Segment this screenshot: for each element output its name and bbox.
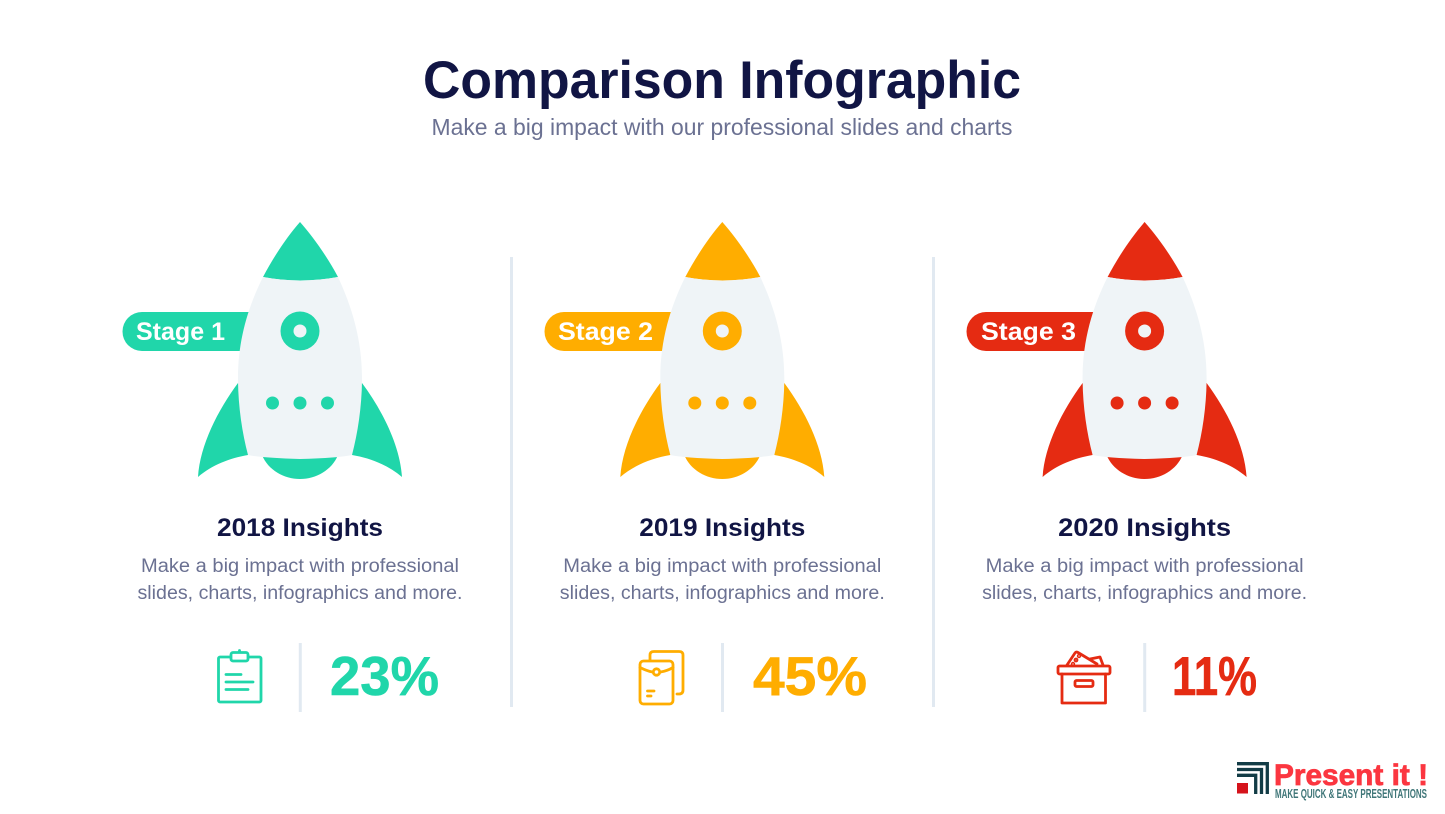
- rocket 3: [1043, 222, 1247, 479]
- statistic 45%: 45%: [753, 645, 867, 707]
- panel: stage 3: [966, 222, 1307, 712]
- panel: stage 1: [123, 222, 463, 712]
- statistic 23%: 23%: [330, 645, 439, 707]
- stage 2 label: Stage 2: [558, 318, 653, 346]
- icon: clipboard: [218, 650, 261, 702]
- logo name: Present it !: [1274, 759, 1428, 792]
- rocket 2: [620, 222, 824, 479]
- description 2: Make a big impact with professional: [563, 556, 881, 577]
- heading: 2019 insights: 2019 Insights: [639, 514, 805, 542]
- stage 1 label: [123, 312, 262, 351]
- stage 3 label: Stage 3: [981, 318, 1076, 346]
- statistic 11%: 11%: [1172, 645, 1257, 707]
- stage 1 label: Stage 1: [136, 318, 225, 346]
- description 1: Make a big impact with professional: [141, 556, 459, 577]
- heading: 2020 insights: 2020 Insights: [1058, 514, 1231, 542]
- icon: box: [1058, 652, 1110, 703]
- stage 3 label: [966, 312, 1106, 351]
- rocket 1: [198, 222, 402, 479]
- title: Comparison Infographic: [423, 51, 1021, 110]
- subtitle: Make a big impact with our professional slides and charts: [432, 114, 1012, 140]
- description 3: slides, charts, infographics and more.: [982, 583, 1307, 604]
- heading: 2018 insights: 2018 Insights: [217, 514, 383, 542]
- description 1: slides, charts, infographics and more.: [138, 583, 463, 604]
- icon: envelopes: [640, 652, 683, 704]
- logo: Present it: [1237, 759, 1428, 801]
- stage 2 label: [544, 312, 684, 351]
- description 3: Make a big impact with professional: [986, 556, 1304, 577]
- panel: stage 2: [544, 222, 885, 712]
- logo mark: [1237, 764, 1267, 794]
- description 2: slides, charts, infographics and more.: [560, 583, 885, 604]
